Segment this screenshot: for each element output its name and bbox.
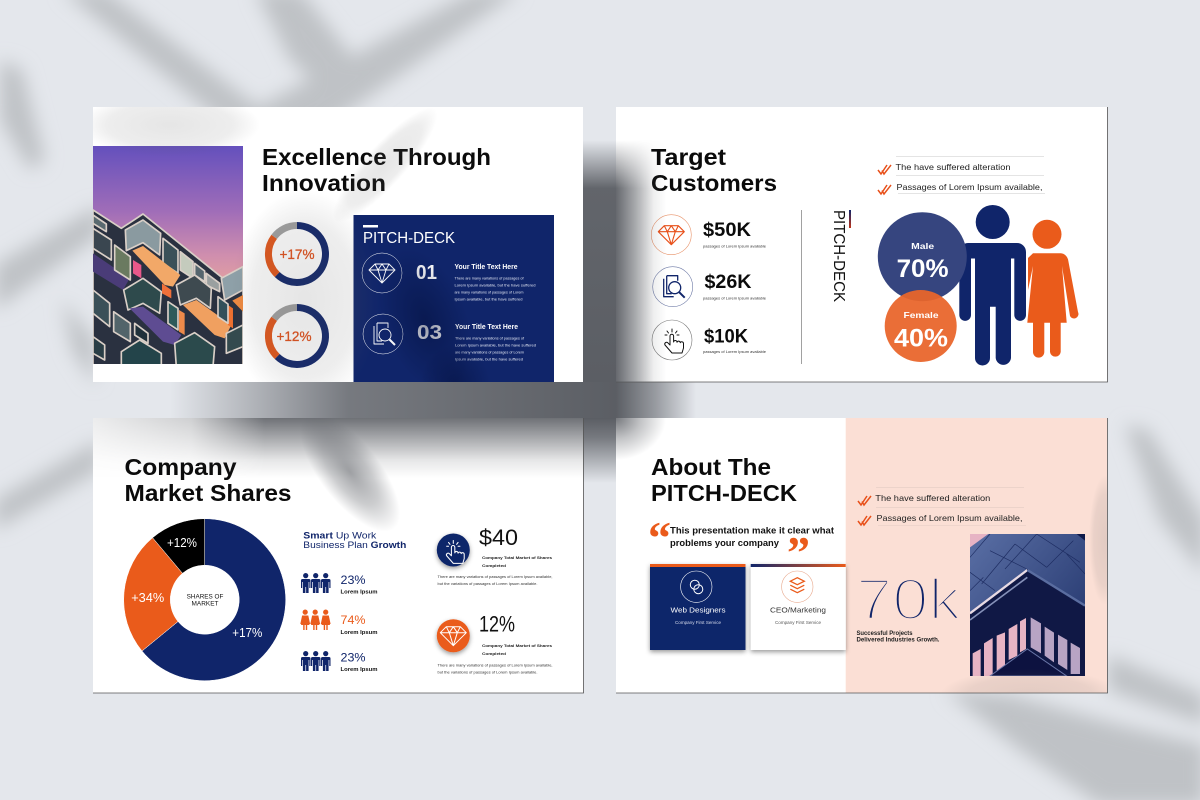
stat: 12%: There are many variations of passages of Lorem Ipsum available, xyxy=(438,662,552,668)
donut chart: market shares: +17% xyxy=(232,625,263,640)
bubble: female 40%: Female xyxy=(904,310,939,320)
donut chart: +12%: +12% xyxy=(276,328,312,344)
people row: 23% second: 23% xyxy=(340,651,366,665)
quote: ” xyxy=(787,527,810,578)
stat: 12%: Company Total Market of Shares xyxy=(482,643,553,648)
photo: corner of building xyxy=(970,534,1085,676)
text block 01: are many variations of passages of Lorem xyxy=(454,290,524,294)
people row: 23% second xyxy=(301,651,378,673)
caption: Successful Projects xyxy=(856,631,913,637)
stat: 12%: Completed xyxy=(482,651,507,656)
panel: pitch-deck xyxy=(354,215,554,382)
slide: About The Pitch-Deck xyxy=(616,418,1108,693)
heading xyxy=(651,454,797,506)
text block 03: Ipsum available, but the have suffered xyxy=(455,358,523,362)
quote: problems your company xyxy=(670,538,780,549)
text block 03: Lorem Ipsum available, but the have suffered xyxy=(455,344,536,348)
bubble: male 70%: Male xyxy=(911,241,934,251)
icon: document search xyxy=(363,314,403,354)
text block 03: Your Title Text Here xyxy=(455,324,518,331)
donut chart: +17% xyxy=(268,225,325,282)
card: CEO/Marketing xyxy=(751,564,846,650)
bubble: female 40%: 40% xyxy=(894,325,948,353)
shadow on fourth slide xyxy=(616,418,1107,692)
stat: 12% xyxy=(437,612,553,674)
donut chart: market shares: +34% xyxy=(131,590,165,605)
heading: Customers xyxy=(651,170,777,196)
people row: 23% second: Lorem Ipsum xyxy=(340,667,378,673)
people row: 23%: 23% xyxy=(340,573,366,587)
quote xyxy=(648,512,835,578)
heading: Target xyxy=(651,144,726,170)
checklist: Passages of Lorem Ipsum available, xyxy=(876,513,1022,523)
card: Web Designers xyxy=(650,564,746,650)
stat: $40: Company Total Market of Shares xyxy=(482,555,553,560)
shadow on second slide xyxy=(616,142,660,382)
text block 01: Ipsum available, but the have suffered xyxy=(454,298,522,302)
text block 03: There are many variations of passages of xyxy=(455,336,525,340)
text block 03: are many variations of passages of Lorem xyxy=(455,350,524,354)
male figure xyxy=(959,205,1026,366)
donut chart: market shares: MARKET xyxy=(191,601,219,608)
checklist: Passages of Lorem Ipsum available, xyxy=(896,182,1042,192)
stat: 12%: but the variations of passages of Lorem Ipsum available. xyxy=(438,670,538,674)
card: Web Designers: Company First Service xyxy=(675,620,721,625)
donut chart: market shares: +12% xyxy=(167,535,197,550)
stat: $26K xyxy=(653,267,767,307)
heading: About The xyxy=(651,454,771,480)
subheading: Smart Up Work xyxy=(303,531,377,541)
checklist: The have suffered alteration xyxy=(896,162,1011,172)
number 03: 03 xyxy=(417,322,442,344)
donut chart: market shares xyxy=(124,519,286,681)
donut chart: +17%: +17% xyxy=(280,246,314,262)
donut chart: +12% xyxy=(268,307,325,364)
heading: Innovation xyxy=(262,170,386,196)
card: CEO/Marketing: CEO/Marketing xyxy=(770,606,826,615)
people row: 23%: Lorem Ipsum xyxy=(340,590,378,596)
panel: pitch-deck: PITCH-DECK xyxy=(363,230,455,247)
caption xyxy=(856,631,940,644)
heading xyxy=(262,144,491,196)
stat: $10K xyxy=(652,320,767,360)
quote: “ xyxy=(648,512,671,563)
stat: $50K: passages of Lorem Ipsum available xyxy=(703,244,767,249)
people row: 74% xyxy=(300,610,378,636)
stat: $50K: $50K xyxy=(703,220,751,241)
stat: $10K: passages of Lorem Ipsum available xyxy=(703,349,767,354)
text block 01 xyxy=(454,264,536,302)
stat: $40: There are many variations of passages of Lorem Ipsum available, xyxy=(438,574,552,579)
stat: $26K: passages of Lorem Ipsum available xyxy=(703,296,767,300)
bubble: male 70%: 70% xyxy=(897,255,949,283)
stat: $40: but the variations of passages of Lorem Ipsum available. xyxy=(438,581,538,586)
text block 01: Lorem Ipsum available, but the have suffered xyxy=(454,284,536,288)
stat: $40 xyxy=(437,525,553,586)
slide: Excellence Through Innovation xyxy=(93,107,583,382)
bubble: female 40% xyxy=(885,290,957,362)
soft shadow on first slide xyxy=(93,107,478,382)
subheading: Business Plan Growth xyxy=(303,540,406,550)
stat: 12%: 12% xyxy=(479,612,515,637)
checklist: The have suffered alteration xyxy=(875,493,991,503)
text block 01: There are many variations of passages of xyxy=(454,276,524,280)
heading: PITCH-DECK xyxy=(651,480,797,506)
people row: 23% xyxy=(301,573,378,596)
stat: $10K: $10K xyxy=(704,327,748,348)
photo: apartment building at dusk xyxy=(93,146,243,367)
donut chart: market shares: SHARES OF xyxy=(187,594,223,601)
heading: Market Shares xyxy=(124,480,292,506)
people row: 74%: 74% xyxy=(340,613,366,627)
heading xyxy=(124,454,292,506)
vertical label: PITCH-DECK xyxy=(830,210,847,302)
icon: diamond xyxy=(362,253,402,293)
people row: 74%: Lorem Ipsum xyxy=(340,630,378,636)
big number: 70k: 70k xyxy=(856,568,962,632)
stat: $50K xyxy=(651,215,767,255)
subheading xyxy=(303,531,406,550)
female figure xyxy=(1027,220,1078,358)
stat: $40: $40 xyxy=(479,525,518,550)
heading: Company xyxy=(124,454,237,480)
number 01: 01 xyxy=(416,262,437,284)
dark window shadow behind slides xyxy=(170,140,696,483)
card: CEO/Marketing: Company First Service xyxy=(775,620,821,625)
caption: Delivered Industries Growth. xyxy=(856,638,940,644)
bubble: male 70% xyxy=(878,212,967,301)
checklist xyxy=(858,488,1026,526)
quote: This presentation make it clear what xyxy=(670,525,835,536)
heading: Excellence Through xyxy=(262,144,491,170)
stat: $26K: $26K xyxy=(704,272,752,293)
shadow on third slide xyxy=(93,418,583,528)
heading xyxy=(651,144,777,196)
text block 03 xyxy=(455,324,536,362)
slide: Company Market Shares xyxy=(93,418,584,693)
stat: $40: Completed xyxy=(482,563,507,568)
pink panel xyxy=(846,418,1107,693)
text block 01: Your Title Text Here xyxy=(454,264,518,271)
card: Web Designers: Web Designers xyxy=(670,606,726,615)
slide: Target Customers xyxy=(616,107,1108,382)
checklist xyxy=(878,156,1045,194)
